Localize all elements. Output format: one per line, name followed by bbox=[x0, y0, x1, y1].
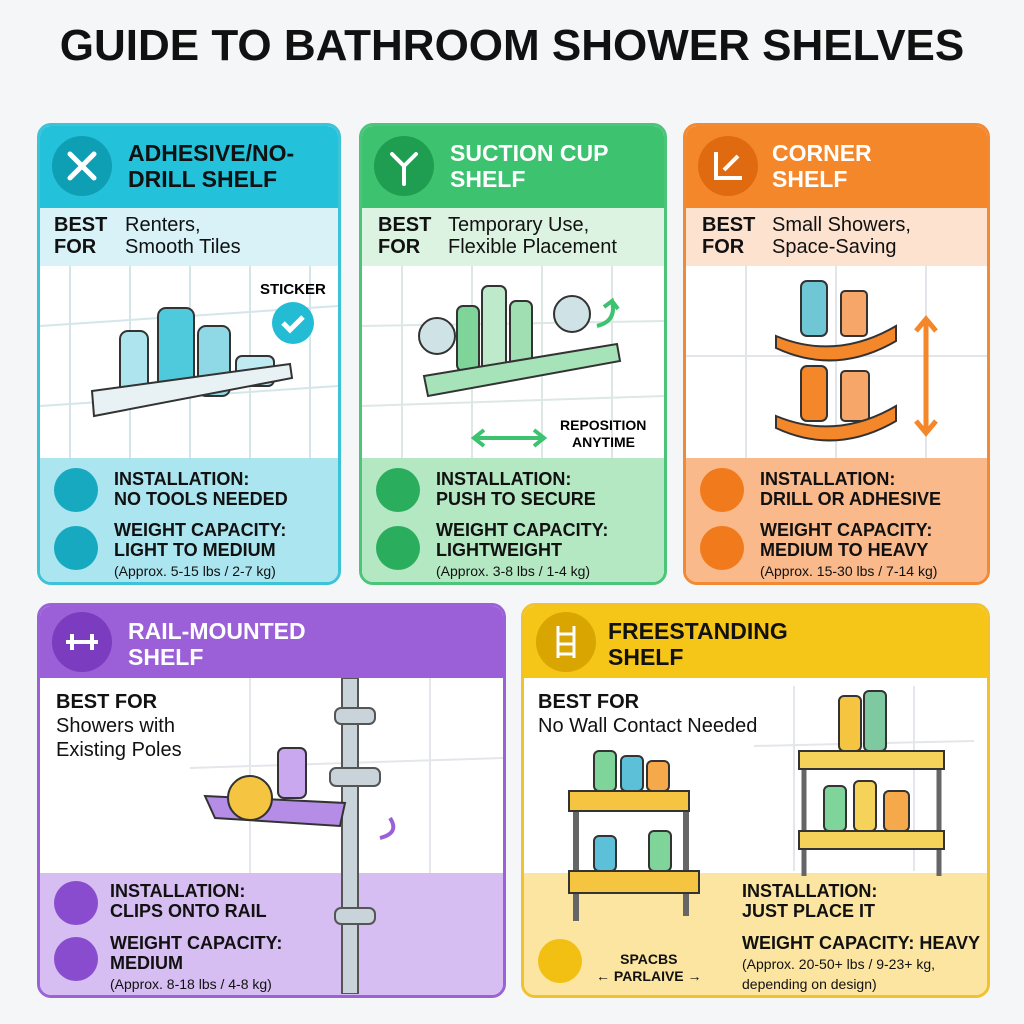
bottom info: NO TOOLS NEEDED bbox=[114, 489, 288, 509]
bottom info: JUST PLACE IT bbox=[742, 901, 875, 921]
header: DRILL SHELF bbox=[128, 166, 277, 192]
bottom info bbox=[40, 873, 503, 995]
bottom info: MEDIUM bbox=[110, 953, 183, 973]
bottom info: (Approx. 8-18 lbs / 4-8 kg) bbox=[110, 976, 272, 992]
bottom info: WEIGHT CAPACITY: bbox=[760, 520, 932, 540]
bottom info bbox=[40, 458, 338, 582]
illustration bbox=[40, 266, 338, 458]
best for: Smooth Tiles bbox=[125, 236, 241, 258]
best for: Renters, bbox=[125, 214, 201, 236]
header: SUCTION CUP bbox=[450, 140, 608, 166]
bottom info bbox=[524, 873, 987, 995]
panel: freestanding bbox=[521, 603, 990, 998]
title: GUIDE TO BATHROOM SHOWER SHELVES bbox=[60, 21, 964, 70]
bottom info: LIGHTWEIGHT bbox=[436, 540, 562, 560]
header bbox=[40, 126, 338, 208]
panel: rail-mounted bbox=[37, 603, 506, 998]
header: CORNER bbox=[772, 140, 872, 166]
best for: FOR bbox=[702, 236, 744, 258]
best for: BEST FOR bbox=[56, 691, 157, 713]
bottom info: PUSH TO SECURE bbox=[436, 489, 596, 509]
best for bbox=[686, 208, 987, 266]
bottom info: INSTALLATION: bbox=[436, 469, 571, 489]
panel: adhesive bbox=[37, 123, 341, 585]
header: SHELF bbox=[608, 644, 683, 670]
header: FREESTANDING bbox=[608, 618, 788, 644]
illustration bbox=[686, 266, 987, 458]
bottom info: DRILL OR ADHESIVE bbox=[760, 489, 941, 509]
best for: BEST bbox=[54, 214, 107, 236]
bottom info: INSTALLATION: bbox=[114, 469, 249, 489]
bottom info: (Approx. 3-8 lbs / 1-4 kg) bbox=[436, 563, 590, 579]
illustration: REPOSITION bbox=[560, 417, 646, 433]
best for: BEST bbox=[702, 214, 755, 236]
bottom info: (Approx. 15-30 lbs / 7-14 kg) bbox=[760, 563, 937, 579]
bottom info: WEIGHT CAPACITY: HEAVY bbox=[742, 933, 980, 953]
best for: Flexible Placement bbox=[448, 236, 617, 258]
best for: Small Showers, bbox=[772, 214, 911, 236]
bottom info: INSTALLATION: bbox=[742, 881, 877, 901]
bottom info: SPACBS bbox=[620, 951, 677, 967]
illustration: STICKER bbox=[260, 281, 326, 298]
best for bbox=[56, 691, 182, 761]
panel: corner bbox=[683, 123, 990, 585]
best for bbox=[362, 208, 664, 266]
illustration bbox=[190, 678, 503, 994]
header: SHELF bbox=[128, 644, 203, 670]
best for: No Wall Contact Needed bbox=[538, 715, 757, 737]
header: ADHESIVE/NO- bbox=[128, 140, 294, 166]
bottom info: (Approx. 20-50+ lbs / 9-23+ kg, bbox=[742, 956, 935, 972]
best for: BEST bbox=[378, 214, 431, 236]
bottom info: WEIGHT CAPACITY: bbox=[110, 933, 282, 953]
best for: Temporary Use, bbox=[448, 214, 589, 236]
bottom info bbox=[686, 458, 987, 582]
bottom info: MEDIUM TO HEAVY bbox=[760, 540, 928, 560]
header bbox=[686, 126, 987, 208]
illustration bbox=[362, 266, 664, 458]
illustration bbox=[568, 686, 974, 921]
header: RAIL-MOUNTED bbox=[128, 618, 306, 644]
best for: Existing Poles bbox=[56, 739, 182, 761]
best for: Space-Saving bbox=[772, 236, 897, 258]
best for bbox=[538, 691, 757, 737]
bottom info: ← PARLAIVE → bbox=[596, 968, 702, 984]
best for: FOR bbox=[54, 236, 96, 258]
bottom info: LIGHT TO MEDIUM bbox=[114, 540, 276, 560]
bottom info: CLIPS ONTO RAIL bbox=[110, 901, 267, 921]
best for: BEST FOR bbox=[538, 691, 639, 713]
best for bbox=[40, 208, 338, 266]
bottom info: WEIGHT CAPACITY: bbox=[114, 520, 286, 540]
illustration: ANYTIME bbox=[572, 434, 635, 450]
panel: suction bbox=[359, 123, 667, 585]
header bbox=[362, 126, 664, 208]
bottom info: depending on design) bbox=[742, 976, 877, 992]
bottom info bbox=[362, 458, 664, 582]
bottom info: WEIGHT CAPACITY: bbox=[436, 520, 608, 540]
header: SHELF bbox=[450, 166, 525, 192]
bottom info: INSTALLATION: bbox=[110, 881, 245, 901]
header: SHELF bbox=[772, 166, 847, 192]
bottom info: INSTALLATION: bbox=[760, 469, 895, 489]
bottom info: (Approx. 5-15 lbs / 2-7 kg) bbox=[114, 563, 276, 579]
best for: Showers with bbox=[56, 715, 175, 737]
header bbox=[40, 606, 503, 678]
header bbox=[524, 606, 987, 678]
best for: FOR bbox=[378, 236, 420, 258]
